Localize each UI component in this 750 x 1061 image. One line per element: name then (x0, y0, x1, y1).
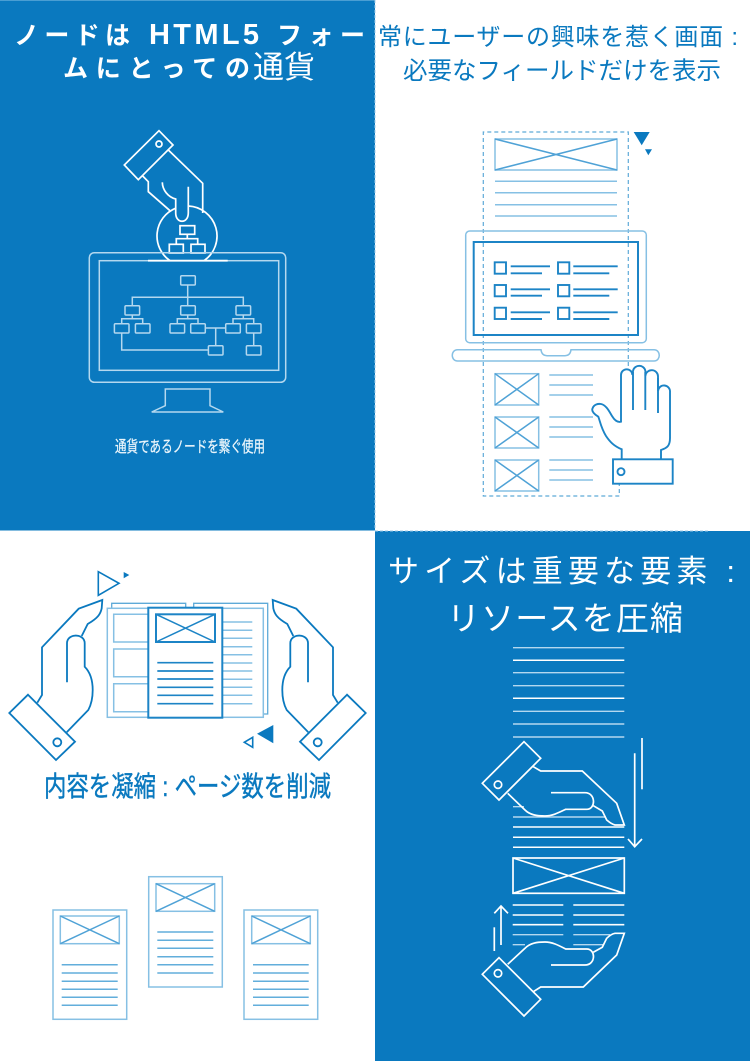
icon: raised hand (592, 366, 673, 484)
icon: right hand (273, 600, 366, 760)
chart: monitor with node tree (89, 253, 286, 412)
arrow: up (494, 906, 508, 951)
heading: node currency: 通貨 (253, 50, 315, 85)
heading: node currency (14, 19, 365, 85)
text lines: lower columns (513, 905, 624, 945)
slot line (148, 260, 228, 262)
heading: show needed fields: 必要なフィールドだけを表示 (403, 57, 721, 85)
icon: top hand (482, 742, 624, 825)
dashed scroll frame (483, 132, 628, 496)
document 2 (149, 877, 222, 987)
icon: hand dropping node coin (124, 131, 217, 261)
icon: triangles (98, 572, 273, 747)
heading: size matters (388, 554, 735, 637)
image placeholder (513, 858, 624, 893)
icon: left hand (9, 600, 102, 760)
heading: show needed fields (378, 24, 738, 85)
heading: node currency: ムにとっての (63, 55, 250, 83)
icon: bottom hand (482, 933, 624, 1016)
heading: node currency: フォー (277, 22, 365, 50)
laptop (452, 231, 659, 361)
text lines: upper (513, 648, 624, 847)
dashed dividers (375, 0, 708, 531)
wireframe: lower list (495, 374, 593, 491)
panel: node currency (0, 0, 375, 530)
heading: size matters: リソースを圧縮 (447, 600, 683, 637)
heading: node currency: HTML5 (149, 19, 259, 51)
document 1 (53, 910, 127, 1019)
panel: condense content (9, 572, 366, 1019)
document 3 (244, 910, 318, 1019)
caption: 通貨であるノードを繋ぐ使用 (115, 438, 265, 456)
arrow: down (628, 738, 642, 847)
wireframe: top content (495, 139, 617, 216)
form fields (495, 262, 618, 319)
heading: size matters: サイズは重要な要素 : (388, 554, 735, 589)
panel: compress resources (375, 531, 750, 1061)
icon: triangles (634, 132, 652, 155)
heading: node currency: ノードは (14, 22, 130, 50)
document stack (107, 603, 268, 718)
heading: reduce pages: 内容を凝縮 : ページ数を削減 (44, 771, 331, 802)
heading: show needed fields: 常にユーザーの興味を惹く画面 : (378, 24, 738, 51)
panel: interesting screens (378, 24, 738, 496)
